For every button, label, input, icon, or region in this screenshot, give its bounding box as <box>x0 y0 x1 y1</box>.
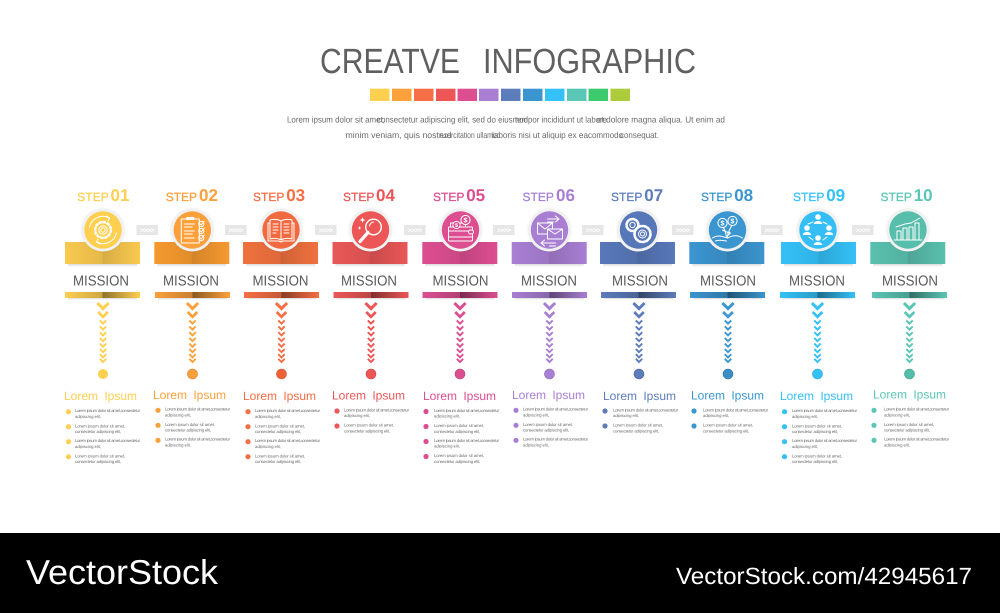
heading: Lorem Ipsum <box>873 388 946 402</box>
chevron arrow <box>276 303 287 362</box>
step label: 10 <box>914 186 933 205</box>
bullet list: consectetur adipiscing elit, <box>75 459 121 464</box>
bullet list: Lorem ipsum dolor sit amet, <box>165 422 215 427</box>
mission label: MISSION <box>73 274 129 290</box>
bullet list: adipiscing elit, <box>434 414 460 419</box>
bullet list: consectetur adipiscing elit, <box>344 428 390 433</box>
bullet list <box>691 407 769 433</box>
colour swatch strip <box>370 89 630 101</box>
bullet list <box>871 407 950 447</box>
bullet list: consectetur adipiscing elit, <box>792 429 838 434</box>
arrow connector 6-7 <box>582 225 604 235</box>
bullet list: consectetur adipiscing elit, <box>703 428 749 433</box>
bullet list: adipiscing elit, <box>523 442 549 447</box>
panel: step 10 <box>870 186 950 447</box>
bullet list: adipiscing elit, <box>884 412 910 417</box>
chevron arrow <box>812 303 823 362</box>
bullet list: adipiscing elit, <box>165 412 191 417</box>
intro paragraph: commodo <box>588 130 623 140</box>
bullet list: Lorem ipsum dolor sit amet,consectetur <box>792 408 858 413</box>
bullet list <box>334 407 410 433</box>
step label: STEP <box>166 190 197 204</box>
bullet list: Lorem ipsum dolor sit amet, <box>255 453 305 458</box>
dot <box>904 369 914 379</box>
chevron arrow <box>544 303 555 362</box>
intro paragraph: laboris nisi ut aliquip ex ea <box>492 130 588 140</box>
icon: wallet with coins <box>439 208 482 252</box>
intro paragraph: minim veniam, quis nostrud <box>346 130 452 140</box>
mission label: MISSION <box>432 274 488 290</box>
bullet list: consectetur adipiscing elit, <box>884 428 930 433</box>
step label: 02 <box>199 186 218 205</box>
bullet list <box>245 408 321 464</box>
mission label: MISSION <box>612 274 668 290</box>
bullet list: Lorem ipsum dolor sit amet, <box>613 423 663 428</box>
chevron arrow <box>722 303 734 362</box>
bullet list: adipiscing elit, <box>255 444 281 449</box>
bullet list: Lorem ipsum dolor sit amet,consectetur <box>255 408 321 413</box>
bullet list: Lorem ipsum dolor sit amet,consectetur <box>703 407 769 412</box>
step label: STEP <box>343 190 374 204</box>
bullet list: consectetur adipiscing elit, <box>434 429 480 434</box>
bullet list <box>155 407 231 447</box>
ribbon <box>422 242 497 267</box>
bullet list: consectetur adipiscing elit, <box>792 459 838 464</box>
bullet list: Lorem ipsum dolor sit amet, <box>792 423 842 428</box>
panel: step 05 <box>422 186 500 464</box>
arrow connector 9-10: >>>> <box>856 227 870 234</box>
arrow connector 1-2: >>>> <box>140 227 155 234</box>
intro paragraph: et dolore magna aliqua. Ut enim ad <box>597 114 725 124</box>
step label: STEP <box>701 190 732 204</box>
bullet list: Lorem ipsum dolor sit amet,consectetur <box>523 407 589 412</box>
dot <box>366 369 376 379</box>
panel: step 09 <box>780 186 858 464</box>
panel: step 08 <box>689 186 769 433</box>
dot <box>723 369 733 379</box>
bullet list: adipiscing elit, <box>703 413 729 418</box>
dot <box>188 369 198 379</box>
bullet list: Lorem ipsum dolor sit amet, <box>703 423 753 428</box>
ribbon <box>689 242 764 267</box>
mission label: MISSION <box>700 274 756 290</box>
panel: step 04 <box>332 186 410 433</box>
panel: step 06 <box>512 186 589 447</box>
bullet list: Lorem ipsum dolor sit amet,consectetur <box>434 438 500 443</box>
heading: Lorem Ipsum <box>153 388 226 402</box>
icon: plant with coins: $ <box>721 220 725 228</box>
arrow connector 3-4: >>>> <box>319 227 333 234</box>
bullet list: Lorem ipsum dolor sit amet,consectetur <box>165 437 231 442</box>
arrow connector 7-8 <box>672 225 694 235</box>
step label: 09 <box>826 186 845 205</box>
chevron arrow <box>97 303 109 362</box>
icon: two gears <box>617 208 660 252</box>
bullet list: Lorem ipsum dolor sit amet, <box>523 422 573 427</box>
ribbon <box>870 242 945 267</box>
icon: wallet with coins: $ <box>455 222 458 229</box>
bullet list: Lorem ipsum dolor sit amet, <box>434 453 484 458</box>
heading: Lorem Ipsum <box>512 388 585 402</box>
title: CREATVE <box>320 42 460 81</box>
arrow connector 5-6: >>>> <box>497 227 511 234</box>
bullet list: Lorem ipsum dolor sit amet,consectetur <box>255 438 321 443</box>
title <box>320 42 696 81</box>
ribbon <box>332 242 408 267</box>
icon: envelopes with arrows <box>528 208 571 252</box>
arrow connector 3-4 <box>315 225 336 235</box>
arrow connector 2-3 <box>225 225 246 235</box>
icon: plant with coins: $ <box>731 218 735 226</box>
mission label: MISSION <box>789 274 845 290</box>
step label: STEP <box>611 190 642 204</box>
bullet list: consectetur adipiscing elit, <box>75 429 121 434</box>
arrow connector 4-5 <box>404 225 426 235</box>
band <box>334 292 408 300</box>
icon: gear with rotating arrows <box>82 208 124 252</box>
arrow connector 7-8: >>>> <box>676 227 690 234</box>
ribbon <box>154 242 229 267</box>
ribbon <box>243 242 318 267</box>
bullet list <box>513 407 589 447</box>
heading: Lorem Ipsum <box>243 389 316 403</box>
bullet list: Lorem ipsum dolor sit amet, <box>75 453 125 458</box>
intro paragraph: exercitation ullamco <box>440 130 500 140</box>
bullet list: Lorem ipsum dolor sit amet,consectetur <box>613 407 679 412</box>
panel: step 01 <box>64 186 141 464</box>
heading: Lorem Ipsum <box>332 388 405 402</box>
bullet list: adipiscing elit, <box>884 442 910 447</box>
band <box>155 292 230 300</box>
arrow connector 1-2 <box>136 225 158 235</box>
bullet list: Lorem ipsum dolor sit amet, <box>434 423 484 428</box>
step label: STEP <box>253 190 284 204</box>
bullet list: adipiscing elit, <box>75 444 101 449</box>
bullet list: Lorem ipsum dolor sit amet, <box>792 453 842 458</box>
bullet list <box>782 408 858 464</box>
chevron arrow <box>187 303 198 362</box>
step label: 05 <box>466 186 485 205</box>
bullet list: consectetur adipiscing elit, <box>523 428 569 433</box>
icon: open book <box>260 208 302 252</box>
heading: Lorem Ipsum <box>691 388 764 402</box>
step label: 01 <box>110 186 129 205</box>
band <box>872 292 947 300</box>
step label: STEP <box>880 190 912 204</box>
bullet list: Lorem ipsum dolor sit amet,consectetur <box>884 437 950 442</box>
dot <box>544 369 554 379</box>
icon: wallet with coins: $ <box>464 216 468 224</box>
chevron arrow <box>904 303 915 362</box>
bullet list: adipiscing elit, <box>792 444 818 449</box>
bullet list: Lorem ipsum dolor sit amet,consectetur <box>344 407 410 412</box>
band <box>512 292 587 300</box>
bullet list <box>423 408 500 464</box>
dot <box>276 369 286 379</box>
dot <box>812 369 822 379</box>
bullet list: consectetur adipiscing elit, <box>165 428 211 433</box>
chevron arrow <box>633 303 645 362</box>
panel: step 07 <box>600 186 679 433</box>
bullet list: adipiscing elit, <box>75 414 101 419</box>
bullet list: consectetur adipiscing elit, <box>434 459 480 464</box>
step label: STEP <box>433 190 464 204</box>
arrow connector 5-6 <box>493 225 514 235</box>
arrow connector 4-5: >>>> <box>408 227 422 234</box>
ribbon <box>512 242 587 267</box>
step label: 04 <box>376 186 395 205</box>
ribbon <box>600 242 675 267</box>
mission label: MISSION <box>341 274 397 290</box>
bullet list: Lorem ipsum dolor sit amet,consectetur <box>434 408 500 413</box>
step label: 03 <box>286 186 305 205</box>
bullet list: consectetur adipiscing elit, <box>613 428 659 433</box>
footer band <box>0 533 1000 613</box>
step label: STEP <box>77 190 109 204</box>
band <box>690 292 765 300</box>
dot <box>634 369 644 379</box>
icon: clipboard checklist <box>171 208 214 252</box>
dot <box>98 369 108 379</box>
bullet list: Lorem ipsum dolor sit amet,consectetur <box>792 438 858 443</box>
bullet list: Lorem ipsum dolor sit amet, <box>884 422 934 427</box>
chevron arrow <box>365 303 377 362</box>
bullet list: consectetur adipiscing elit, <box>255 429 301 434</box>
heading: Lorem Ipsum <box>423 389 496 403</box>
bullet list <box>66 408 141 464</box>
band <box>601 292 676 300</box>
bullet list: adipiscing elit, <box>613 413 639 418</box>
footer image id: VectorStock.com/42945617 <box>676 563 972 589</box>
bullet list: consectetur adipiscing elit, <box>255 459 301 464</box>
bullet list: adipiscing elit, <box>434 444 460 449</box>
arrow connector 8-9 <box>761 225 782 235</box>
arrow connector 2-3: >>>> <box>229 227 243 234</box>
bullet list: Lorem ipsum dolor sit amet, <box>75 423 125 428</box>
band <box>422 292 498 300</box>
band <box>244 292 319 300</box>
intro paragraph: tempor incididunt ut labore <box>515 114 607 124</box>
icon: people in a circle <box>796 208 840 252</box>
bullet list: Lorem ipsum dolor sit amet,consectetur <box>75 438 141 443</box>
panel: step 02 <box>153 186 231 447</box>
bullet list: Lorem ipsum dolor sit amet, <box>344 423 394 428</box>
title: INFOGRAPHIC <box>483 42 696 81</box>
intro paragraph: Lorem ipsum dolor sit amet, <box>287 114 385 124</box>
bullet list: Lorem ipsum dolor sit amet, <box>255 423 305 428</box>
bullet list: adipiscing elit, <box>165 442 191 447</box>
ribbon <box>65 242 140 267</box>
bullet list: Lorem ipsum dolor sit amet,consectetur <box>165 407 231 412</box>
chevron arrow <box>454 303 466 362</box>
heading: Lorem Ipsum <box>603 389 676 403</box>
step label: 07 <box>644 186 663 205</box>
mission label: MISSION <box>521 274 577 290</box>
arrow connector 6-7: >>>> <box>586 227 600 234</box>
heading: Lorem Ipsum <box>64 389 137 403</box>
intro paragraph: consectetur adipiscing elit, sed do eiusmod <box>377 114 528 124</box>
panel: step 03 <box>243 186 321 464</box>
mission label: MISSION <box>252 274 308 290</box>
arrow connector 9-10 <box>852 225 874 235</box>
bullet list: Lorem ipsum dolor sit amet,consectetur <box>884 407 950 412</box>
bullet list: Lorem ipsum dolor sit amet,consectetur <box>523 437 589 442</box>
footer logo text: VectorStock <box>26 554 219 592</box>
icon: plant with coins <box>706 208 749 252</box>
bullet list: adipiscing elit, <box>792 414 818 419</box>
mission label: MISSION <box>163 274 219 290</box>
bullet list: adipiscing elit, <box>344 413 370 418</box>
step label: STEP <box>522 190 554 204</box>
arrow connector 8-9: >>>> <box>765 227 779 234</box>
intro paragraph: consequat. <box>620 130 659 140</box>
icon: rising bar chart <box>886 208 930 252</box>
bullet list: Lorem ipsum dolor sit amet,consectetur <box>75 408 141 413</box>
heading: Lorem Ipsum <box>780 389 853 403</box>
mission label: MISSION <box>882 274 938 290</box>
dot <box>455 369 465 379</box>
step label: STEP <box>793 190 824 204</box>
band <box>65 292 140 300</box>
step label: 06 <box>556 186 575 205</box>
bullet list <box>602 407 679 433</box>
intro paragraph <box>287 114 725 140</box>
bullet list: adipiscing elit, <box>523 412 549 417</box>
icon: magnifying glass <box>349 208 392 252</box>
ribbon <box>781 242 856 267</box>
band <box>780 292 855 300</box>
bullet list: adipiscing elit, <box>255 414 281 419</box>
step label: 08 <box>734 186 753 205</box>
